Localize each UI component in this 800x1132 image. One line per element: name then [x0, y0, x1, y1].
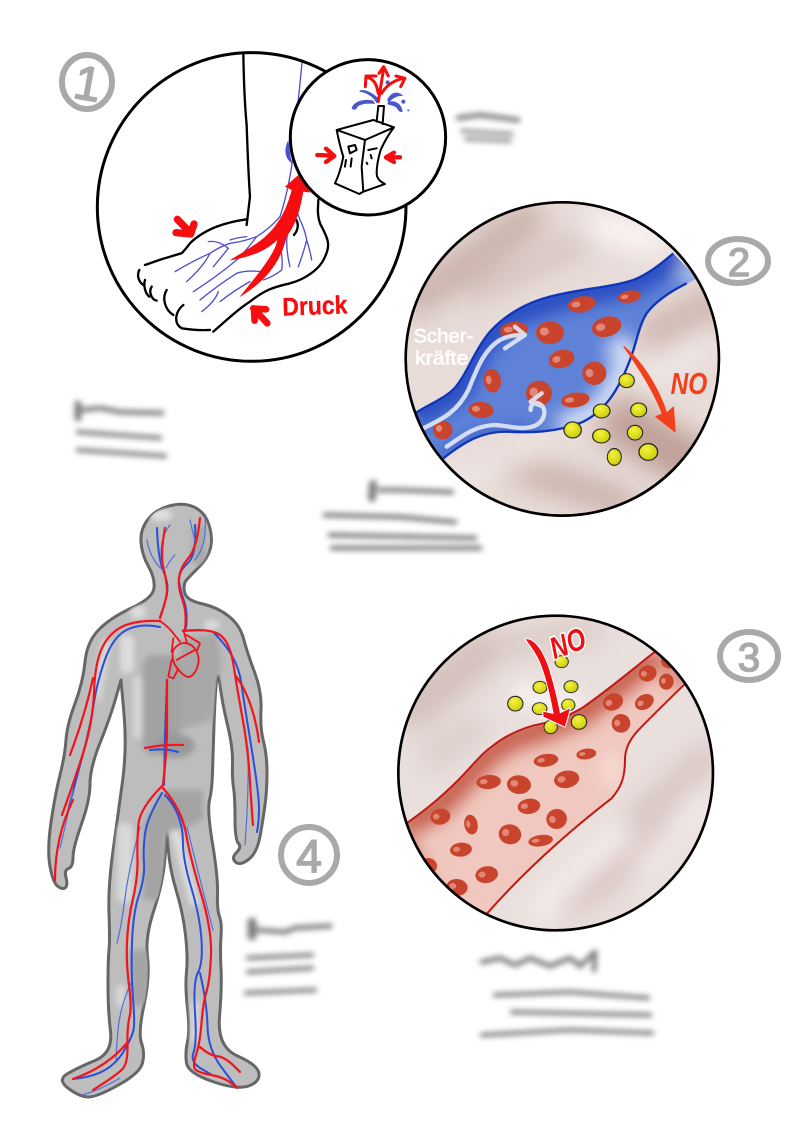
label NO: NO [671, 367, 707, 401]
body shading [92, 509, 222, 1042]
number 3 badge: 3 [738, 636, 760, 680]
label shear force [414, 328, 473, 365]
label Druck: Druck [282, 291, 349, 322]
shear flow arrows [423, 327, 544, 447]
NO molecules [508, 656, 587, 734]
heart [160, 621, 200, 678]
number 2 badge: 2 [728, 241, 750, 285]
blue splash [352, 90, 403, 112]
NO arrow [526, 639, 570, 727]
number 1 badge: 1 [70, 56, 105, 113]
panel 1: foot with veins and pressure [97, 53, 446, 361]
number 4 badge: 4 [296, 830, 322, 882]
juice box [335, 106, 394, 194]
NO molecules outside vein [564, 374, 658, 465]
number 1 badge [62, 55, 112, 113]
tissue texture [407, 210, 727, 507]
small red arrow bottom [253, 308, 267, 323]
number 3 badge [720, 632, 778, 680]
squeeze arrows [317, 149, 400, 162]
label shear force: kräfte [415, 349, 468, 370]
foot veins [175, 60, 312, 312]
number 4 badge [281, 827, 337, 883]
NO arrow [624, 347, 675, 432]
artery body [408, 653, 684, 912]
text placeholder blurred bottom [482, 952, 652, 1035]
text placeholder blurred center [325, 484, 480, 548]
label shear force: Scher- [413, 327, 473, 348]
number 2 badge [708, 239, 768, 285]
foot outline [138, 53, 328, 332]
human body with circulatory system [49, 504, 267, 1097]
big red arrow [229, 175, 311, 297]
text placeholder blurred near body [246, 922, 330, 993]
inset: squeezed juice box [290, 60, 446, 215]
vein body [417, 254, 696, 458]
panel 3: artery with NO entering [395, 610, 720, 930]
red blood cells [420, 652, 678, 897]
body silhouette [49, 504, 267, 1097]
tissue texture [402, 630, 715, 917]
text placeholder blurred top [458, 115, 518, 141]
panel 2: vein with shear force and NO [400, 200, 730, 520]
small red arrow top [176, 219, 194, 234]
text placeholder blurred left [78, 404, 165, 456]
veins [60, 518, 259, 1095]
red arrows from straw [365, 67, 405, 102]
arteries [55, 518, 259, 1090]
label NO: NO [545, 622, 591, 666]
red blood cells [432, 289, 642, 441]
